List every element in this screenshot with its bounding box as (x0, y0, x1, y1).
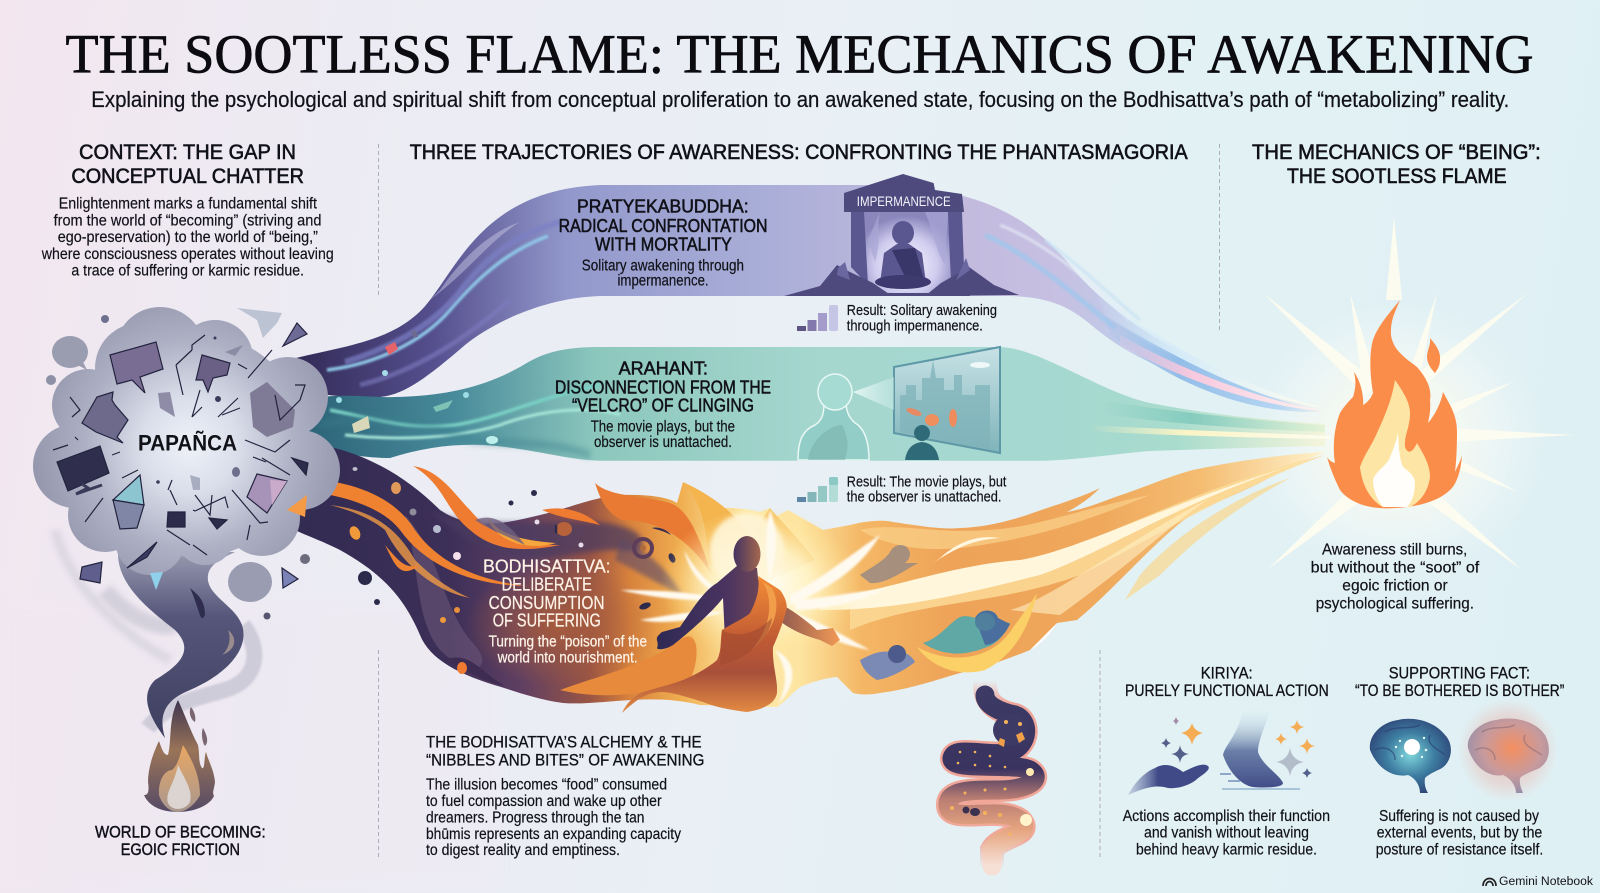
result: arahant: the observer is unattached. (847, 490, 1001, 506)
panel: bodhisattva text (483, 556, 647, 666)
panel: arahant text (555, 357, 771, 451)
panel: bodhisattva text: DELIBERATE (502, 574, 592, 595)
text block: alchemy body: The illusion becomes “food” consumed (426, 776, 667, 793)
panel: bodhisattva text: world into nourishment. (497, 649, 638, 666)
result: arahant (797, 475, 1006, 506)
icon: sleeper blue (860, 645, 915, 680)
flying particles (348, 467, 677, 674)
panel: pratyekabuddha text (559, 196, 768, 290)
papanca cloud (33, 307, 380, 738)
text block: supporting fact body: posture of resistance itself. (1376, 841, 1543, 858)
heading: context: CONCEPTUAL CHATTER (71, 165, 304, 188)
panel: bodhisattva text: Turning the “poison” of the (489, 634, 647, 651)
panel: bodhisattva text: CONSUMPTION (489, 592, 604, 613)
icon: hand (1128, 765, 1209, 795)
text block: alchemy body: to fuel compassion and wake up other (426, 793, 662, 810)
text block: flame caption (1311, 541, 1480, 612)
panel: supporting fact (1355, 664, 1564, 858)
subtitle: Explaining the psychological and spiritual shift from conceptual proliferation to an awakened state, focusing on the Bodhisattva’s path of “metabolizing” reality. (91, 87, 1509, 112)
panel: pratyekabuddha text: impermanence. (618, 273, 709, 290)
icon: impermanence temple (784, 174, 1019, 296)
text block: alchemy body: dreamers. Progress through the tan (426, 809, 644, 826)
heading: kiriya (1125, 664, 1329, 700)
text block: supporting fact body: external events, but by the (1377, 825, 1542, 842)
text block: flame caption: but without the “soot” of (1311, 559, 1480, 576)
flame rays and glow (1245, 217, 1573, 580)
text block: kiriya body: and vanish without leaving (1144, 825, 1309, 842)
papanca cloud: PAPAÑCA (138, 431, 237, 456)
icon: sooty flame (144, 700, 215, 812)
panel: pratyekabuddha text: PRATYEKABUDDHA: (577, 196, 749, 217)
panel: alchemy text (426, 733, 704, 859)
bar chart icon (797, 305, 838, 331)
heading: three trajectories: THREE TRAJECTORIES OF AWARENESS: CONFRONTING THE PHANTASMAGORIA (410, 141, 1188, 164)
heading: kiriya: PURELY FUNCTIONAL ACTION (1125, 682, 1329, 700)
text block: context body: a trace of suffering or karmic residue. (71, 263, 304, 280)
panel: arahant text: “VELCRO” OF CLINGING (572, 395, 754, 416)
text block: kiriya body (1123, 808, 1330, 858)
result: pratyekabuddha: through impermanence. (847, 319, 983, 335)
panel: kiriya (1123, 664, 1330, 858)
heading: mechanics of being: THE MECHANICS OF “BEING”: (1252, 141, 1541, 164)
text block: supporting fact body (1376, 808, 1543, 858)
text block: flame caption: Awareness still burns, (1322, 541, 1467, 558)
figure: bodhisattva monk (622, 536, 840, 713)
text block: context body: from the world of “becoming” (striving and (54, 213, 321, 230)
heading: supporting fact (1355, 664, 1564, 700)
text block: kiriya body: behind heavy karmic residue. (1136, 841, 1317, 858)
icon: digestive tract (948, 685, 1035, 868)
heading: mechanics of being (1252, 141, 1541, 188)
band: arahant (300, 347, 1330, 461)
movie screen (894, 347, 1000, 453)
heading: supporting fact: SUPPORTING FACT: (1389, 664, 1530, 682)
bar chart icon (797, 477, 838, 502)
icon: foot (1220, 710, 1300, 789)
band: pratyekabuddha (296, 185, 1330, 412)
smoke tail (118, 550, 243, 738)
text block: alchemy body (426, 776, 681, 859)
heading: alchemy (426, 733, 704, 769)
viewer silhouette (905, 425, 939, 460)
icon: observer and movie screen (798, 347, 1000, 460)
heading: kiriya: KIRIYA: (1201, 664, 1253, 682)
watermark: Gemini Notebook: Gemini Notebook (1499, 876, 1593, 888)
text block: flame caption: egoic friction or (1342, 578, 1448, 595)
panel: arahant text: observer is unattached. (594, 434, 732, 451)
panel: arahant text: The movie plays, but the (591, 419, 735, 436)
panel: context text (41, 141, 334, 280)
text block: supporting fact body: Suffering is not caused by (1379, 808, 1539, 825)
text block: context body: Enlightenment marks a fundamental shift (59, 196, 317, 213)
icon: sleeper teal (923, 610, 1010, 654)
streaks toward flame (820, 455, 1325, 672)
title: THE SOOTLESS FLAME: THE MECHANICS OF AWAKENING (66, 24, 1534, 84)
heading: context: CONTEXT: THE GAP IN (79, 141, 296, 164)
panel: bodhisattva text: BODHISATTVA: (483, 556, 611, 577)
panel: pratyekabuddha text: RADICAL CONFRONTATION (559, 215, 768, 236)
panel: pratyekabuddha text: WITH MORTALITY (595, 234, 732, 255)
heading: context (71, 141, 304, 188)
icon: sootless flame (1327, 300, 1462, 508)
result: pratyekabuddha: Result: Solitary awakening (847, 303, 997, 319)
text block: flame caption: psychological suffering. (1316, 595, 1474, 612)
radiant glow (620, 507, 885, 705)
icon: agitated brain (1458, 698, 1558, 802)
heading: mechanics of being: THE SOOTLESS FLAME (1287, 165, 1507, 188)
panel: arahant text: ARAHANT: (619, 357, 708, 378)
heading: alchemy: THE BODHISATTVA’S ALCHEMY & THE (426, 733, 702, 751)
text block: alchemy body: bhūmis represents an expanding capacity (426, 826, 681, 843)
text block: context body (41, 196, 334, 280)
text block: kiriya body: Actions accomplish their function (1123, 808, 1330, 825)
heading: alchemy: “NIBBLES AND BITES” OF AWAKENING (426, 751, 704, 769)
heading: supporting fact: “TO BE BOTHERED IS BOTHER” (1355, 682, 1564, 700)
heading: world of becoming: EGOIC FRICTION (121, 841, 240, 859)
result: arahant: Result: The movie plays, but (847, 475, 1006, 491)
result: pratyekabuddha (797, 303, 997, 335)
panel: pratyekabuddha text: Solitary awakening through (582, 258, 744, 275)
panel: arahant text: DISCONNECTION FROM THE (555, 376, 771, 397)
figure: meditating monk (875, 221, 931, 289)
icon: impermanence temple: IMPERMANENCE (857, 194, 951, 209)
icon: sparkles (1161, 717, 1315, 778)
fragments (57, 323, 308, 588)
heading: world of becoming: WORLD OF BECOMING: (95, 824, 266, 842)
band: bodhisattva (295, 442, 1325, 713)
icon: calm brain (1370, 719, 1451, 793)
icon: sleeper top (860, 545, 918, 583)
text block: context body: ego-preservation) to the world of “being,” (58, 229, 318, 246)
text block: context body: where consciousness operates without leaving (41, 246, 334, 263)
panel: bodhisattva text: OF SUFFERING (493, 610, 601, 631)
text block: alchemy body: to digest reality and emptiness. (426, 842, 620, 859)
satellite shapes (46, 315, 380, 620)
heading: world of becoming (95, 824, 266, 859)
